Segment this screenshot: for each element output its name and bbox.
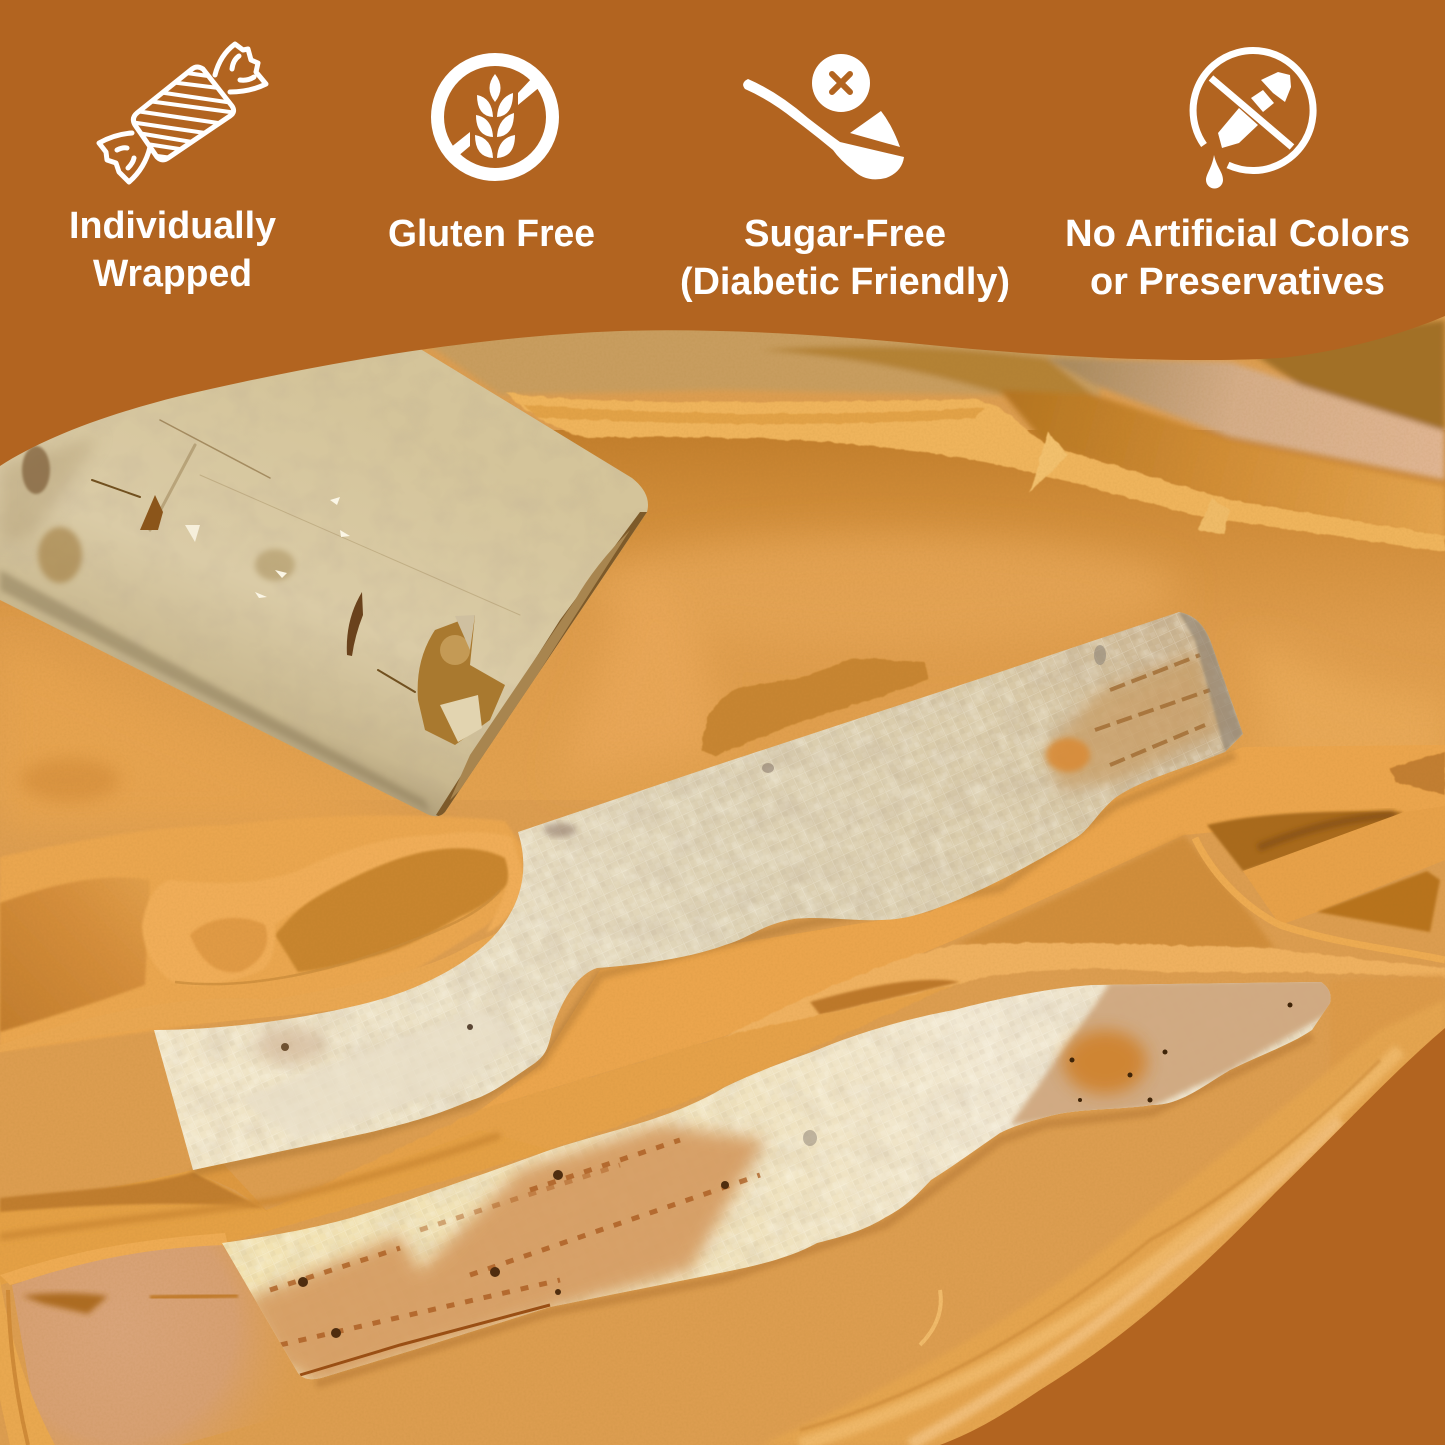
wafer strip: lower xyxy=(222,982,1331,1388)
label: no artificial colors: No Artificial Colors xyxy=(1065,213,1410,255)
bottom-left glossy butter xyxy=(0,1245,340,1445)
label: individually wrapped xyxy=(69,205,276,295)
bottom-right raised ridges xyxy=(760,1000,1445,1445)
icon: spoon with crossed sugar xyxy=(743,54,904,179)
feature: gluten free xyxy=(388,60,595,255)
label: no artificial colors: or Preservatives xyxy=(1090,261,1385,303)
label: individually wrapped: Wrapped xyxy=(93,253,252,295)
feature: individually wrapped xyxy=(69,44,276,295)
wafer toasted area left xyxy=(245,1125,765,1385)
stick scratches xyxy=(92,420,520,692)
main butter highlights xyxy=(0,535,1445,830)
label: sugar free: (Diabetic Friendly) xyxy=(680,261,1010,303)
wafer strip: upper xyxy=(130,600,1260,1190)
label: individually wrapped: Individually xyxy=(69,205,276,247)
bottom-right brown corner xyxy=(940,1028,1445,1445)
feature: no artificial colors xyxy=(1065,50,1410,303)
label: sugar free xyxy=(680,213,1010,303)
icon: crossed dropper xyxy=(1193,50,1313,188)
cream ridges upper xyxy=(505,392,1445,552)
band between the wafers xyxy=(225,985,954,1243)
top strip of butter xyxy=(400,320,1445,540)
icon: wrapped candy xyxy=(99,44,266,182)
butter grain texture xyxy=(0,320,1445,1445)
main butter field xyxy=(0,430,1445,800)
wafer mottling xyxy=(390,1002,1072,1258)
top brown wave banner xyxy=(0,0,1445,466)
wafer toasted area right xyxy=(1010,978,1335,1125)
stick end face xyxy=(436,512,650,820)
wafer toasted patch xyxy=(1045,650,1220,790)
icon: crossed wheat xyxy=(438,60,552,174)
wafer mottling xyxy=(176,746,1044,1149)
label: gluten free: Gluten Free xyxy=(388,213,595,255)
feature: sugar free xyxy=(680,54,1010,303)
lower-left butter layers xyxy=(0,1130,550,1285)
label: no artificial colors xyxy=(1065,213,1410,303)
wood stick xyxy=(0,330,660,820)
label: sugar free: Sugar-Free xyxy=(744,213,946,255)
stick mottling xyxy=(0,330,660,820)
left fold of butter xyxy=(0,816,525,1052)
torn hole in butter xyxy=(702,658,928,756)
left butter dimple xyxy=(20,758,120,802)
central and right butter ridges xyxy=(480,745,1445,1110)
